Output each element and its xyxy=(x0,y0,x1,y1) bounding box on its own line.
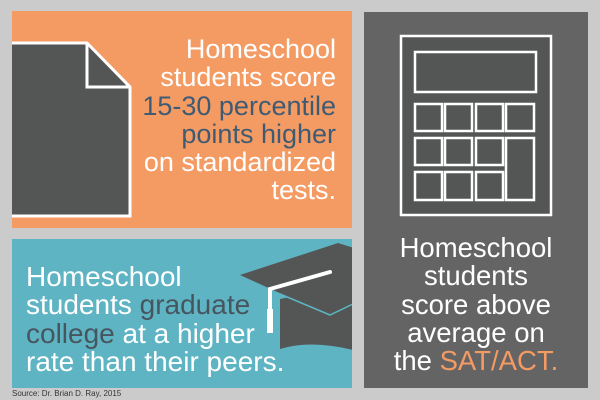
text: college: college at a higher xyxy=(26,318,255,349)
panel: blue college xyxy=(12,239,352,388)
text: college: students graduate xyxy=(26,289,250,320)
text: test scores: points higher xyxy=(181,119,336,149)
icon: calculator xyxy=(400,34,552,216)
text: SAT/ACT: the SAT/ACT. xyxy=(394,345,558,376)
text: test scores xyxy=(142,34,336,205)
icon: document xyxy=(12,42,132,218)
text: test scores: students score xyxy=(160,62,336,92)
text: SAT/ACT: score above xyxy=(401,289,551,320)
text: SAT/ACT xyxy=(394,232,558,376)
text: SAT/ACT: students xyxy=(424,260,528,291)
icon: graduation cap xyxy=(240,243,352,350)
source note: Source: Dr. Brian D. Ray, 2015 xyxy=(12,389,121,398)
text: college: rate than their peers. xyxy=(26,346,284,377)
text: test scores: on standardized xyxy=(144,147,336,177)
text: college: Homeschool xyxy=(26,261,182,292)
text: test scores: Homeschool xyxy=(186,34,336,64)
text: test scores: tests. xyxy=(271,175,336,205)
text: SAT/ACT: average on xyxy=(407,317,545,348)
panel: orange test scores xyxy=(12,11,352,228)
text: SAT/ACT: Homeschool xyxy=(400,232,552,263)
panel: dark SAT xyxy=(364,12,588,388)
text: college xyxy=(26,261,284,377)
text: test scores: 15-30 percentile xyxy=(142,91,336,121)
